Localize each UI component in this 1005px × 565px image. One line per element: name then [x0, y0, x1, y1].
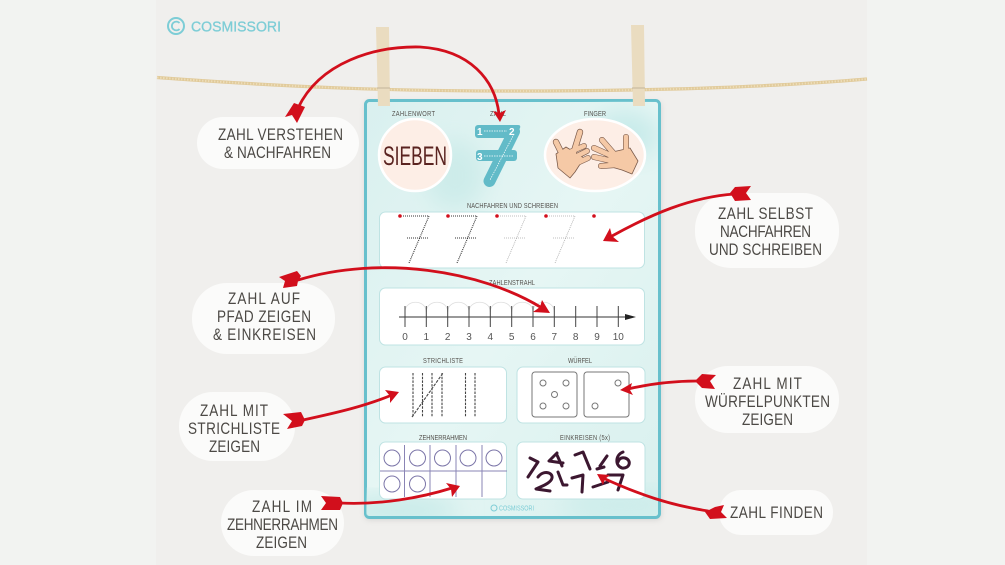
callout: Zahl auf Pfad	[192, 283, 335, 354]
big tracing digit 7: 1	[477, 127, 483, 138]
callout: Würfelpunkte: ZAHL MIT	[733, 375, 802, 393]
callout: Zahl verstehen: ZAHL VERSTEHEN	[218, 126, 343, 144]
arrow: Pfad to number line	[279, 268, 550, 313]
callout: Zahl finden: ZAHL FINDEN	[730, 504, 823, 522]
arrow: Würfel to dice	[620, 374, 716, 395]
number labels: 10	[613, 332, 624, 343]
callout: Zahl auf Pfad: ZAHL AUF	[228, 290, 300, 308]
number labels	[402, 332, 624, 343]
number labels: 3	[466, 332, 472, 343]
panel: find and circle digits	[517, 442, 645, 499]
icon: die five	[532, 372, 577, 417]
panel: tally marks	[380, 367, 506, 423]
icon: right hand	[594, 137, 638, 174]
heading: Würfel: WÜRFEL	[568, 356, 592, 365]
callout: Zahl finden	[719, 490, 833, 535]
callout: Zahl verstehen	[197, 117, 359, 169]
number labels: 9	[594, 332, 600, 343]
clothespin right	[631, 25, 645, 106]
icon: die two	[584, 372, 629, 417]
infographic canvas	[156, 17, 868, 556]
callout: Würfelpunkte	[695, 366, 839, 433]
callout: Würfelpunkte: WÜRFELPUNKTEN	[705, 392, 830, 411]
callout: Zehnerrahmen: ZEHNERRAHMEN	[227, 516, 338, 534]
callout: Zehnerrahmen: ZEIGEN	[256, 534, 307, 552]
number labels: 6	[530, 332, 536, 343]
number labels: 0	[402, 332, 408, 343]
callout: Zahl auf Pfad: PFAD ZEIGEN	[217, 308, 311, 326]
panel: ten frame	[380, 442, 507, 499]
number labels: 8	[573, 332, 579, 343]
number labels: 1	[424, 332, 430, 343]
heading: Nachfahren und Schreiben: NACHFAHREN UND SCHREIBEN	[467, 203, 558, 210]
panel: tracing sevens	[380, 212, 644, 268]
arrow: Strichliste to tally	[283, 390, 399, 429]
callout: Würfelpunkte: ZEIGEN	[742, 411, 793, 429]
callout: selbst nachfahren: ZAHL SELBST	[718, 205, 813, 223]
clothespin left	[376, 27, 390, 106]
panel: dice	[517, 367, 645, 423]
big tracing digit 7: 2	[509, 127, 515, 138]
heading: Zehnerrahmen: ZEHNERRAHMEN	[419, 435, 467, 442]
arrow: finden to digits	[597, 474, 727, 519]
arrow: selbst to tracing	[603, 186, 751, 242]
arrow: verstehen to digit	[285, 47, 506, 123]
callout: Zehnerrahmen: ZAHL IM	[252, 498, 312, 516]
heading: Finger: FINGER	[584, 111, 606, 118]
heading: Zahlenwort: ZAHLENWORT	[392, 111, 435, 118]
heading: Strichliste: STRICHLISTE	[423, 358, 463, 365]
number word circle: SIEBEN	[383, 141, 447, 171]
callout: Strichliste: ZAHL MIT	[200, 402, 268, 420]
heading: Einkreisen: EINKREISEN (5x)	[560, 435, 610, 442]
callout: Zahl auf Pfad: & EINKREISEN	[213, 326, 316, 344]
number word circle	[379, 119, 451, 191]
callout: Strichliste	[179, 392, 295, 461]
rope	[157, 78, 867, 91]
callout: selbst nachfahren	[695, 193, 839, 268]
brand logo: COSMISSORI	[191, 18, 281, 36]
arrow: Zehnerrahmen to frame	[321, 483, 460, 510]
callout: Strichliste: STRICHLISTE	[188, 420, 280, 438]
callout: Zehnerrahmen	[221, 490, 344, 556]
heading: Zahlenstrahl: ZAHLENSTRAHL	[489, 280, 535, 287]
poster worksheet	[364, 99, 662, 522]
number labels: 4	[488, 332, 494, 343]
big tracing digit 7	[475, 125, 520, 181]
heading: Zahl: ZAHL	[490, 111, 506, 118]
number labels: 2	[445, 332, 451, 343]
poster footer logo	[491, 505, 534, 512]
callout: Strichliste: ZEIGEN	[209, 438, 260, 456]
callout: selbst nachfahren: NACHFAHREN	[720, 223, 811, 241]
number labels: 5	[509, 332, 515, 343]
callout: Zahl verstehen: & NACHFAHREN	[224, 144, 331, 162]
poster footer logo: COSMISSORI	[499, 506, 534, 512]
callout: selbst nachfahren: UND SCHREIBEN	[709, 241, 822, 259]
panel: number line	[380, 288, 644, 345]
icon: left hand	[556, 132, 588, 178]
finger counting oval	[545, 119, 645, 191]
number labels: 7	[552, 332, 558, 343]
big tracing digit 7: 3	[477, 152, 483, 163]
